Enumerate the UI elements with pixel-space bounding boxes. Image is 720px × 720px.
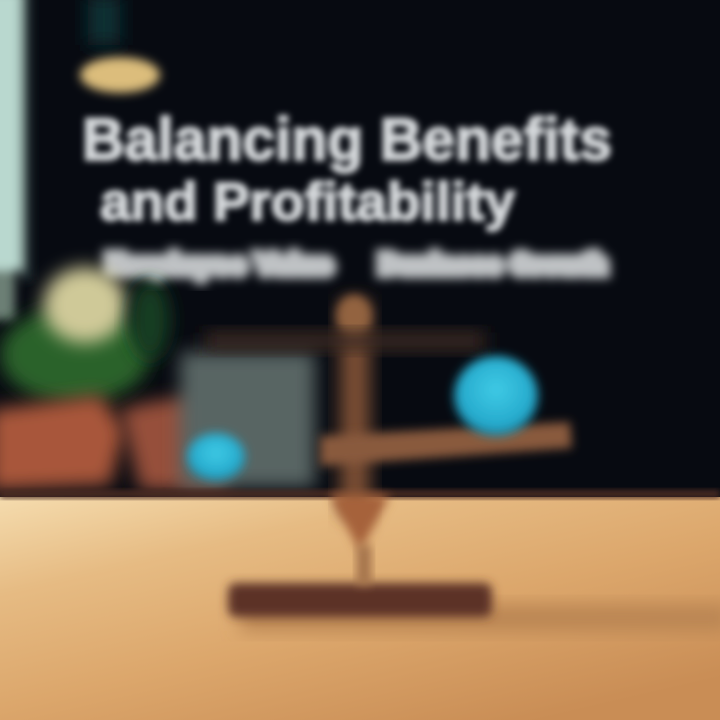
title: blurred heading text bbox=[82, 106, 612, 232]
potted plant bbox=[0, 267, 250, 490]
scale shadow bbox=[240, 605, 720, 631]
grey box behind scale bbox=[180, 352, 315, 487]
subtitle bars: blurred text: Business Growth bbox=[378, 248, 608, 281]
title: blurred heading text: Balancing Benefits bbox=[82, 106, 612, 173]
title: blurred heading text: and Profitability bbox=[100, 172, 515, 232]
scale base bbox=[228, 583, 492, 617]
lower tray bbox=[320, 422, 572, 466]
pendant lamp bbox=[80, 0, 160, 93]
small blue ball bbox=[187, 433, 245, 481]
subtitle bars: blurred text bbox=[105, 248, 608, 281]
scale column bbox=[340, 300, 370, 515]
upper arm bbox=[205, 332, 485, 350]
table top bbox=[0, 490, 720, 720]
large blue ball bbox=[454, 356, 538, 436]
window strip at left edge bbox=[0, 0, 31, 320]
balance scale bbox=[205, 295, 720, 631]
subtitle bars: blurred text: Employee Value bbox=[105, 248, 333, 281]
background: dark wall bbox=[0, 0, 720, 500]
